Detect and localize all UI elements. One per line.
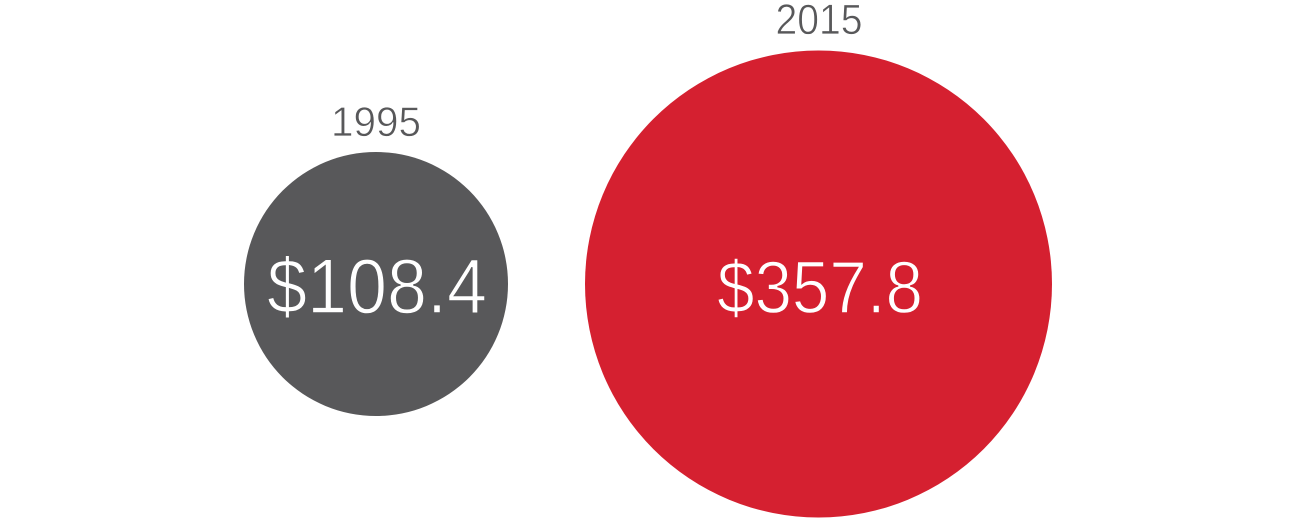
label: 1995: 1995 — [331, 98, 421, 145]
circle: 2015 value: $357.8 — [717, 246, 923, 329]
circle: 1995 value: $108.4 — [267, 242, 487, 330]
circle: 1995 value — [244, 152, 508, 416]
